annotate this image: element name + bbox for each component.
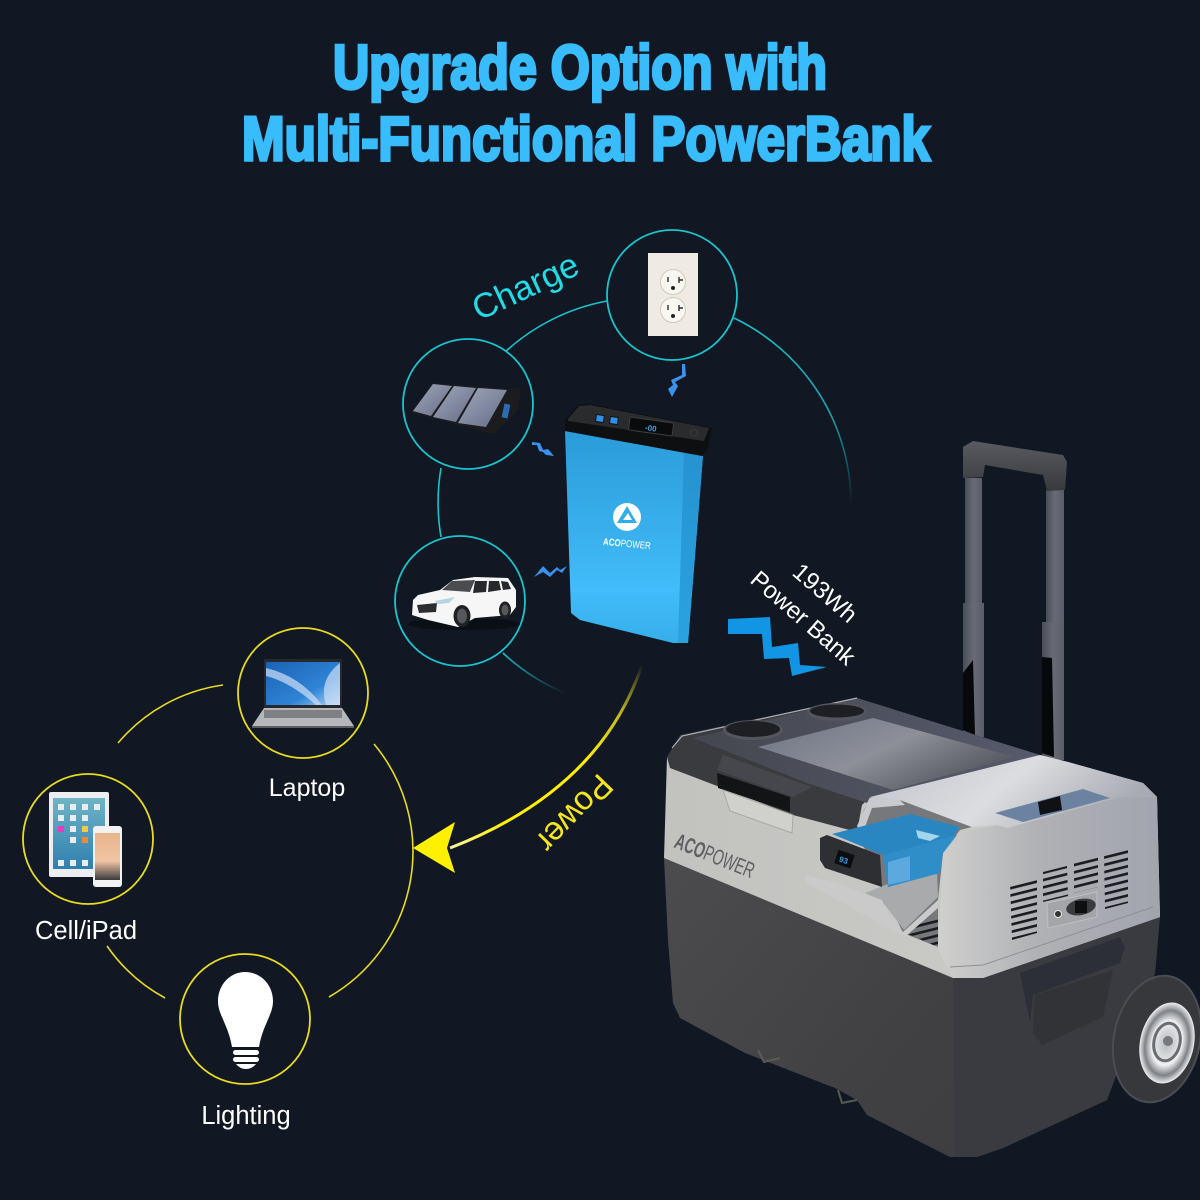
ports and display xyxy=(595,414,698,436)
side handle bulge xyxy=(1020,937,1125,1023)
title: Upgrade Option with xyxy=(333,34,827,102)
body rim line xyxy=(950,907,1153,967)
cup holder right recess xyxy=(810,704,864,718)
title xyxy=(242,34,930,174)
flap interior xyxy=(865,873,938,930)
slot frame xyxy=(857,798,905,835)
latch black channel xyxy=(717,773,790,812)
top cap xyxy=(565,404,712,456)
control panel xyxy=(995,789,1110,822)
charge label: Charge xyxy=(466,246,585,328)
power label: Power xyxy=(529,767,621,860)
lid highlight xyxy=(672,698,857,748)
lower dark body xyxy=(664,858,1160,1157)
lid top surface xyxy=(693,698,1040,803)
cell label: Cell/iPad xyxy=(35,917,137,945)
cooler telescopic handle xyxy=(963,441,1067,760)
light top plate xyxy=(870,755,1157,828)
foot clip right xyxy=(838,1090,857,1103)
lighting label: Lighting xyxy=(201,1102,291,1130)
panel: light bulb icon xyxy=(180,954,310,1084)
cup holder left recess xyxy=(726,721,780,737)
laptop label: Laptop xyxy=(269,774,345,802)
panel: laptop icon xyxy=(238,628,368,758)
zigzag: car to power bank xyxy=(534,566,567,577)
zigzag: solar to power bank xyxy=(532,442,554,456)
zigzag: outlet to power bank xyxy=(668,364,686,397)
title: Multi-Functional PowerBank xyxy=(242,105,930,174)
docked power bank xyxy=(820,814,960,887)
lower right face xyxy=(953,917,1160,1157)
lower vents xyxy=(903,915,938,947)
power inlet xyxy=(1047,892,1097,928)
power arrow xyxy=(413,665,642,873)
side handle recess xyxy=(1033,970,1113,1045)
power ring arcs xyxy=(107,685,413,998)
docked power bank: 93 xyxy=(838,855,850,866)
cup holder right xyxy=(807,703,867,721)
logo xyxy=(602,503,651,552)
panel: cell and tablet icon xyxy=(23,774,153,904)
latch housing xyxy=(717,755,812,797)
cooler xyxy=(664,698,1160,1157)
right grey side xyxy=(938,783,1160,978)
panel: solar panel icon xyxy=(403,339,533,469)
panel: wall outlet icon xyxy=(607,230,737,360)
grey mid body xyxy=(664,755,1160,978)
foot clip left xyxy=(758,1050,780,1062)
panel: car icon xyxy=(395,536,525,666)
power bank capacity label: Power Bank xyxy=(745,566,861,672)
cup holder left xyxy=(723,720,783,740)
carry handle well xyxy=(723,790,793,833)
power bank xyxy=(565,404,712,643)
lid solar panel xyxy=(758,718,1015,790)
lid front band xyxy=(667,698,1040,832)
open flap xyxy=(805,875,938,937)
body xyxy=(565,431,703,643)
brand text: ACOPOWER xyxy=(671,828,758,883)
logo: ACOPOWER xyxy=(602,537,651,552)
charge ring arcs xyxy=(438,301,851,693)
slot interior xyxy=(857,800,972,947)
side vents xyxy=(1010,847,1128,940)
ports and display: -00 xyxy=(644,423,658,434)
big zigzag arrow xyxy=(728,617,827,676)
cooler wheel xyxy=(1102,967,1200,1111)
power bank capacity label: 193Wh xyxy=(787,558,862,629)
